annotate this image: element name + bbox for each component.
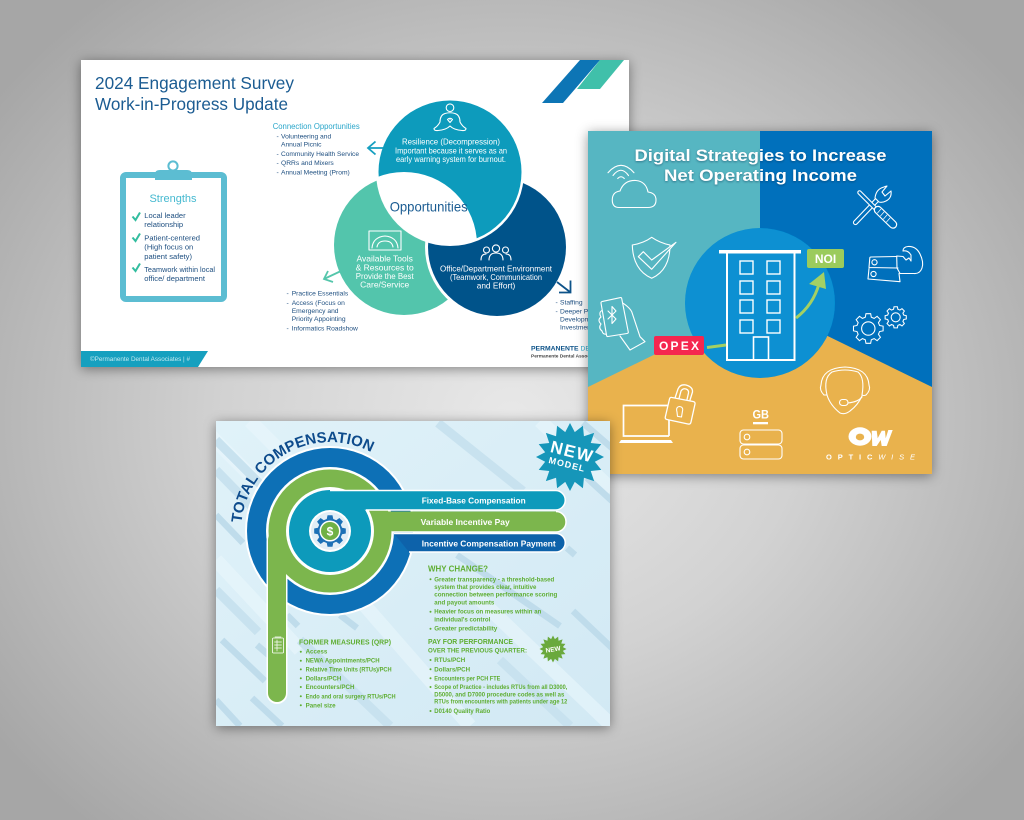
OPEX tag [654,336,704,355]
pay for performance: PAY FOR PERFORMANCE [428,637,513,646]
pay for performance: RTUs/PCH [434,657,466,664]
panel: engagement survey slide [81,60,629,367]
why change: individual's control [434,616,491,623]
title: Digital Strategies to Increase [634,146,886,165]
pay for performance: D0140 Quality Ratio [434,708,491,715]
former measures: Endo and oral surgery RTUs/PCH [306,693,396,700]
practice list: Priority Appointing [292,316,346,323]
office text: (Teamwork, Communication [450,272,542,282]
resilience text: early warning system for burnout. [396,154,506,164]
title [634,146,886,185]
why change: Greater transparency - a threshold-based [434,576,555,583]
icon: gear dollar [309,510,351,552]
icon: wifi cloud [608,165,656,208]
logo text: PERMANENTE DENTAL [531,346,607,353]
NOI tag: NOI [815,252,836,266]
venn: green circle [334,180,448,315]
staffing list: - [556,299,558,306]
office text [440,263,553,291]
clipboard: strengths: Patient-centered [144,234,200,242]
new model burst: NEW [549,437,596,466]
practice list: - [286,300,289,307]
staffing list: Staffing [560,299,583,306]
logo stripes [542,60,624,103]
line from OPEX [707,345,726,348]
panel: digital strategies [588,131,932,474]
icon: laptop lock [619,385,695,443]
icon: people [481,245,511,260]
clipboard: strengths: Teamwork within local [144,265,215,274]
icon: gears [853,307,906,343]
connection opportunities list: - [276,160,279,167]
arrow: tools [324,271,341,282]
former measures: Panel size [306,702,336,709]
resilience text: Resilience (Decompression) [402,136,500,146]
panel: total compensation [208,415,618,736]
NOI tag [807,249,844,268]
icon: building [719,250,801,360]
tools text: Available Tools [356,254,413,264]
connection opportunities list: Connection Opportunities [273,122,360,131]
clipboard: strengths: office/ department [144,274,206,283]
tools text: Provide the Best [356,271,414,281]
why change: Greater predictability [434,626,498,633]
connection opportunities list: Volunteering and [281,133,331,140]
pay for performance: Encounters per PCH FTE [434,675,500,682]
bar: variable incentive [380,512,566,532]
former measures: NEWA Appointments/PCH [306,658,380,665]
icon: tools and resources [369,231,401,250]
former measures: Relative Time Units (RTUs)/PCH [306,666,392,673]
resilience text [395,136,507,164]
why change: and payout amounts [434,599,495,606]
icon: shield [632,237,676,278]
venn: navy circle [428,178,566,316]
pay for performance: Dollars/PCH [434,666,471,673]
staffing list: Investment [560,325,593,332]
pay for performance: OVER THE PREVIOUS QUARTER: [428,648,527,655]
pay for performance [428,637,568,715]
practice list: Access (Focus on [292,300,345,307]
connection opportunities list: Annual Meeting (Prom) [281,169,350,176]
icon: gear dollar: $ [327,524,334,538]
bar: fixed base: Fixed-Base Compensation [422,496,526,506]
pay for performance: RTUs from encounters with patients under age 12 [434,699,568,706]
former measures: FORMER MEASURES (QRP) [299,640,391,647]
opticwise logo [826,427,916,462]
why change: system that provides clear, intuitive [434,584,537,591]
bar: incentive compensation [394,534,565,552]
staffing list: - [556,309,558,316]
slide title: 2024 Engagement Survey [95,73,294,93]
icon: phone in hand [599,298,645,350]
former measures: Dollars/PCH [306,675,342,682]
why change: Heavier focus on measures within an [434,609,542,616]
why change: connection between performance scoring [434,592,558,599]
icon: clipboard [272,637,284,653]
office text: Office/Department Environment [440,263,553,273]
practice list: Emergency and [292,308,339,315]
footer bar: ©Permanente Dental Associates | # [90,355,190,363]
icon: headset [820,367,870,414]
slide title [95,73,294,114]
why change: WHY CHANGE? [428,563,488,573]
small new burst [540,636,566,662]
connection opportunities list: - [276,169,279,176]
bar: variable incentive: Variable Incentive Pay [421,517,510,527]
tools text: & Resources to [356,262,414,272]
clipboard: strengths [123,161,224,299]
concentric rings [245,446,415,704]
staffing list: Deeper Professional [560,309,621,316]
connection opportunities list: QRRs and Mixers [281,160,334,167]
staffing list [556,299,621,332]
footer bar [81,351,208,367]
venn: teal circle [378,100,522,244]
title: Net Operating Income [664,166,857,185]
practice list [286,291,358,332]
connection opportunities list: - [276,133,279,140]
arrow: resilience [368,142,384,154]
clipboard: strengths: Local leader [144,211,186,220]
staffing list: Development [560,317,600,324]
pay for performance: D5000, and D7000 procedure codes as well as [434,692,565,699]
arrow: to NOI [796,272,826,318]
former measures: Encounters/PCH [306,684,355,691]
new model burst: MODEL [548,455,586,474]
icon: server with muscle arm [868,246,923,282]
icon: gb storage: GB [752,410,769,422]
practice list: Informatics Roadshow [292,325,358,332]
connection opportunities list: - [276,151,279,158]
slide title: Work-in-Progress Update [95,94,288,114]
clipboard: strengths: patient safety) [144,252,192,261]
why change [428,563,558,633]
diagonal stripes [200,421,612,726]
logo text: Permanente Dental Associates [531,354,601,360]
clipboard: strengths: Strengths [149,193,197,205]
clipboard: strengths: (High focus on [144,242,193,252]
logo text [531,346,607,360]
small new burst: NEW [545,645,562,655]
pay for performance: Scope of Practice - includes RTUs from all D3000, [434,684,568,691]
icon: tools [856,186,893,224]
former measures: Access [306,649,328,656]
connection opportunities list: Annual Picnic [281,142,322,148]
connection opportunities list: Community Health Service [281,151,359,158]
practice list: - [286,291,289,298]
bar: fixed base [330,490,565,510]
icon: meditation [434,104,466,131]
central circle [685,228,835,378]
OPEX tag: OPEX [659,339,699,353]
curved heading: TOTAL COMPENSATION [231,432,374,522]
bar: incentive compensation: Incentive Compensation Payment [422,539,556,549]
tools text [356,254,414,290]
arrow: office [557,280,570,292]
office text: and Effort) [477,281,516,291]
center label: Opportunities [390,199,468,215]
resilience text: Important because it serves as an [395,145,507,155]
icon: gb storage [740,410,782,459]
practice list: - [286,325,289,332]
tools text: Care/Service [360,280,410,290]
new model burst [536,423,604,491]
former measures [299,640,396,709]
opticwise logo: OPTIC WISE [826,452,916,462]
connection opportunities list [273,122,360,176]
practice list: Practice Essentials [292,291,349,298]
clipboard: strengths: relationship [144,220,183,229]
